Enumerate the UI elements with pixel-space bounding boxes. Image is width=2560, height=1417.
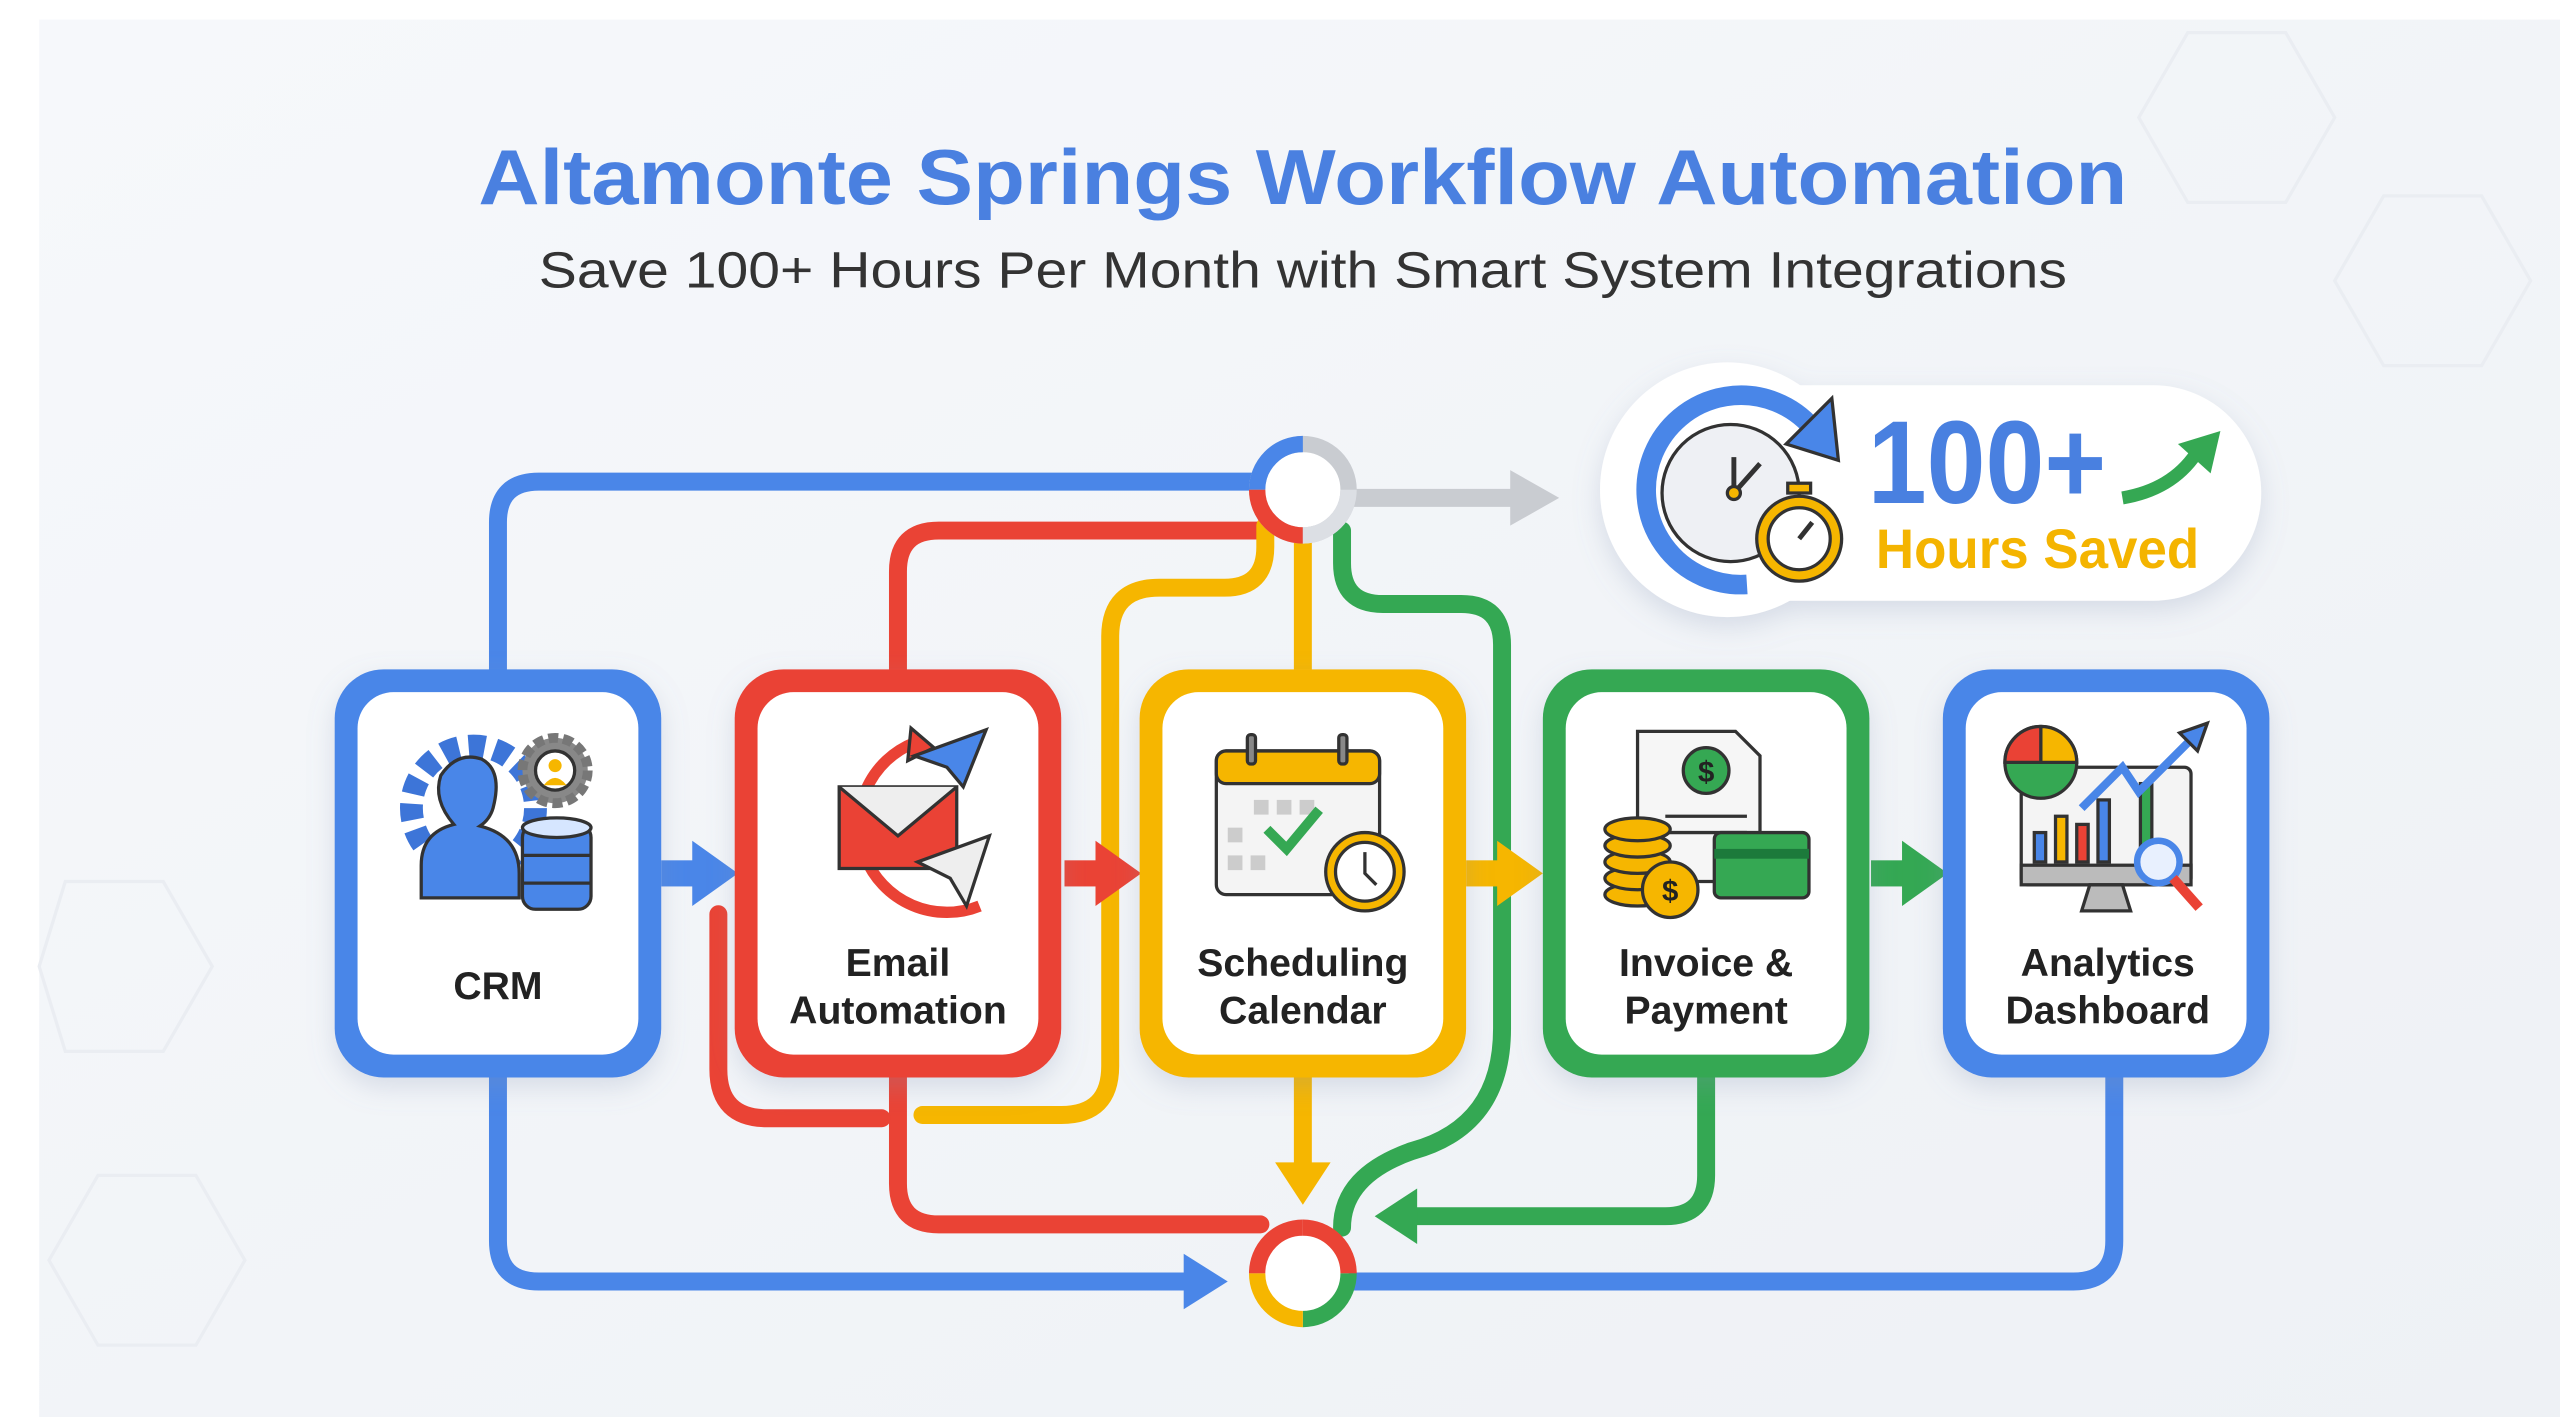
icon: invoice: $ [1698,756,1714,789]
icon: invoice: $ [1662,875,1678,908]
card: CRM [335,669,661,1077]
card: Invoice & Payment: Payment [1624,990,1788,1033]
node: top hub [1257,444,1349,535]
badge: 100+ hours saved: Hours Saved [1876,518,2199,580]
icon: calendar [1216,735,1404,911]
subtitle: Save 100+ Hours Per Month with Smart System Integrations [539,241,2067,298]
node: bottom hub [1257,1228,1349,1319]
card: CRM: CRM [453,965,543,1008]
card: Email Automation: Automation [789,990,1007,1033]
icon: CRM [411,738,591,909]
card: Scheduling Calendar [1140,669,1466,1077]
icon: clock with refresh arrow [1646,395,1842,585]
icon: invoice [1605,731,1809,917]
arrowheads [1184,470,1559,1309]
card: Email Automation [735,669,1061,1077]
icon: email [839,728,989,912]
card: Analytics Dashboard [1943,669,2269,1077]
badge: 100+ hours saved [1600,362,2261,617]
card: Analytics Dashboard: Dashboard [2005,990,2210,1033]
card: Analytics Dashboard: Analytics [2021,942,2195,985]
card: Scheduling Calendar: Calendar [1219,990,1387,1033]
badge: 100+ hours saved: 100+ [1868,397,2106,528]
icon: analytics [2005,723,2207,911]
card: Scheduling Calendar: Scheduling [1197,942,1408,985]
card: Invoice & Payment: Invoice & [1619,942,1793,985]
arrows between cards [661,841,1948,906]
title: Altamonte Springs Workflow Automation [478,133,2127,221]
connector lines [498,482,2114,1282]
card: Invoice & Payment [1543,669,1869,1077]
card: Email Automation: Email [846,942,950,985]
